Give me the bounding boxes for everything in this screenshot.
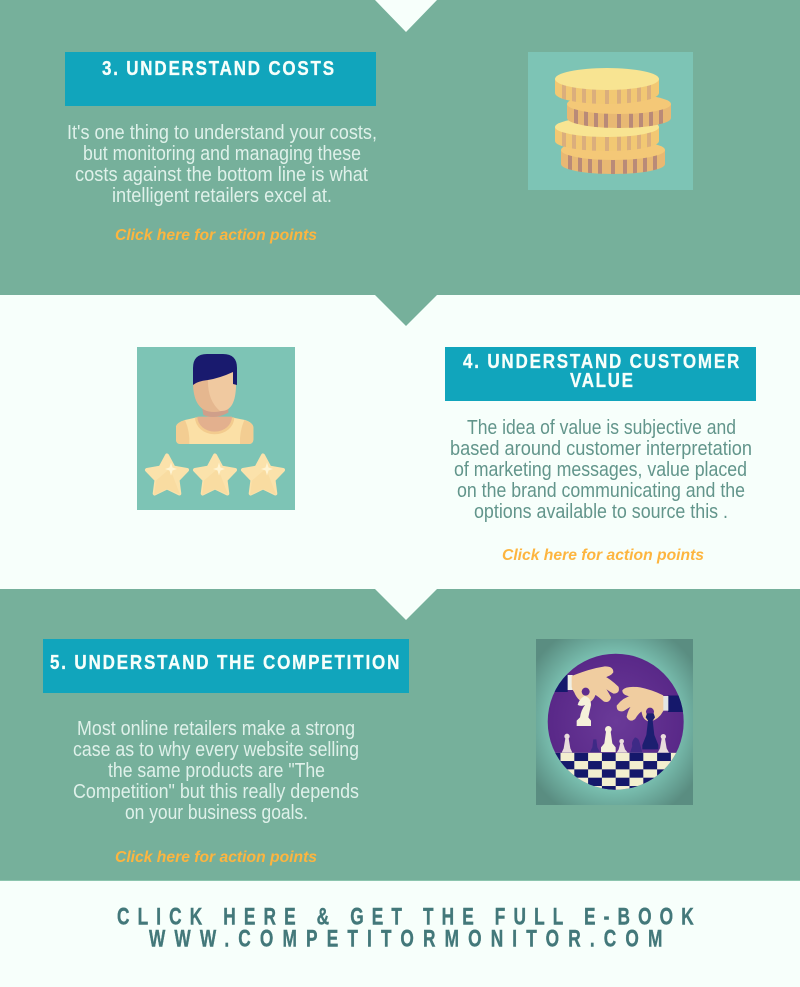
heading: understand customer value — [445, 347, 756, 401]
text block: costs description: intelligent retailers excel at. — [112, 185, 332, 207]
link: action points: Click here for action points — [502, 547, 704, 564]
text block: customer value description: The idea of value is subjective and — [467, 417, 736, 439]
right hand — [618, 688, 662, 721]
text block: customer value description: on the brand communicating and the — [457, 480, 745, 502]
section 5: understand the competition — [0, 589, 800, 881]
white knight — [577, 696, 591, 726]
heading: understand the competition — [43, 639, 409, 693]
section 3: understand costs — [0, 0, 800, 295]
link: action points: Click here for action points — [115, 849, 317, 866]
black king — [642, 713, 658, 749]
text block: customer value description: options available to source this . — [474, 501, 728, 523]
text block: customer value description: based around customer interpretation — [450, 438, 752, 460]
text block: competition description — [73, 718, 359, 824]
text block: customer value description — [450, 417, 752, 523]
text block: competition description: Most online retailers make a strong — [77, 718, 355, 740]
text block: costs description: It's one thing to understand your costs, — [67, 122, 377, 144]
left hand — [573, 667, 618, 702]
text block: customer value description: of marketing messages, value placed — [454, 459, 747, 481]
heading: understand costs — [65, 52, 376, 106]
grip hole left — [582, 688, 590, 696]
heading: understand the competition: 5. UNDERSTAND THE COMPETITION — [50, 651, 399, 673]
text block: costs description — [67, 122, 377, 207]
text block: costs description: costs against the bottom line is what — [75, 164, 368, 186]
section 4: understand customer value — [0, 295, 800, 589]
icon: coin stack — [528, 52, 693, 190]
heading: understand costs: 3. UNDERSTAND COSTS — [102, 57, 334, 79]
text block: costs description: but monitoring and managing these — [83, 143, 361, 165]
heading: understand customer value: 4. UNDERSTAND CUSTOMER — [463, 350, 740, 372]
grip hole right — [646, 708, 654, 716]
link: action points: Click here for action points — [115, 227, 317, 244]
icon: chess hands — [536, 639, 693, 805]
footer: call to action: CLICK HERE & GET THE FULL E-BOOK — [117, 904, 694, 930]
text block: competition description: case as to why every website selling — [73, 739, 359, 761]
text block: competition description: Competition" but this really depends — [73, 781, 359, 803]
text block: competition description: on your business goals. — [125, 802, 308, 824]
footer: call to action: WWW.COMPETITORMONITOR.COM — [149, 926, 662, 952]
heading: understand customer value: VALUE — [570, 369, 633, 391]
footer: call to action — [0, 880, 800, 987]
left cuff — [568, 675, 573, 690]
text block: competition description: the same products are "The — [108, 760, 325, 782]
pawns on board — [562, 726, 669, 753]
icon: customer with star rating — [137, 347, 295, 510]
right cuff — [662, 696, 668, 711]
